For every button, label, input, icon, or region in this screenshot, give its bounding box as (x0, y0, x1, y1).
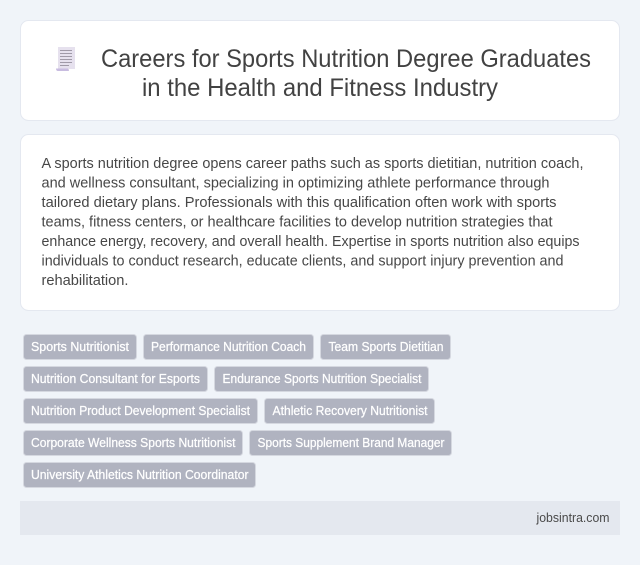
tag: Sports Supplement Brand Manager: Sports Supplement Brand Manager (258, 436, 444, 450)
tag: Sports Supplement Brand Manager (250, 430, 452, 456)
icon: document scroll (56, 47, 75, 71)
text block: description: tailored dietary plans. Professionals with this qualification often work with sports (42, 195, 556, 211)
text block: description: A sports nutrition degree opens career paths such as sports dietitian, nutrition coach, (42, 156, 584, 172)
footer source text: jobsintra.com (536, 511, 610, 525)
tag: Athletic Recovery Nutritionist (264, 398, 434, 424)
tag: Team Sports Dietitian: Team Sports Dietitian (328, 340, 444, 354)
tag: Performance Nutrition Coach: Performance Nutrition Coach (151, 340, 306, 354)
text block: description: individuals to conduct research, educate clients, and support injury prevention and (42, 254, 564, 270)
panel: description card (20, 134, 620, 310)
text block: description (42, 156, 584, 289)
text block: description: enhance energy, recovery, and overall health. Expertise in sports nutrition also equips (42, 234, 580, 250)
tag: Athletic Recovery Nutritionist: Athletic Recovery Nutritionist (272, 404, 428, 418)
tag: Performance Nutrition Coach (144, 334, 314, 360)
tag: University Athletics Nutrition Coordinator (24, 462, 256, 488)
tag list: career roles (24, 334, 452, 488)
tag: Sports Nutritionist: Sports Nutritionist (31, 340, 130, 354)
tag: Endurance Sports Nutrition Specialist (214, 366, 428, 392)
tag: Corporate Wellness Sports Nutritionist (24, 430, 242, 456)
text block: description: rehabilitation. (42, 273, 128, 289)
tag: Sports Nutritionist (24, 334, 136, 360)
tag: Corporate Wellness Sports Nutritionist: Corporate Wellness Sports Nutritionist (31, 436, 236, 450)
tag: University Athletics Nutrition Coordinator: University Athletics Nutrition Coordinator (31, 468, 248, 482)
tag: Nutrition Consultant for Esports: Nutrition Consultant for Esports (31, 372, 200, 386)
text block: description: teams, fitness centers, or healthcare facilities to develop nutrition strategies that (42, 214, 552, 230)
tag: Nutrition Product Development Specialist (24, 398, 258, 424)
title: Careers for Sports Nutrition Degree Graduates (101, 45, 591, 73)
tag: Team Sports Dietitian (320, 334, 450, 360)
tag: Nutrition Product Development Specialist: Nutrition Product Development Specialist (31, 404, 250, 418)
tag: Endurance Sports Nutrition Specialist: Endurance Sports Nutrition Specialist (222, 372, 422, 386)
title: in the Health and Fitness Industry (142, 74, 498, 102)
tag: Nutrition Consultant for Esports (24, 366, 208, 392)
panel: title card (20, 20, 620, 120)
footer bar (20, 501, 620, 535)
text block: description: and wellness consultant, specializing in optimizing athlete performance through (42, 176, 550, 192)
title (101, 45, 591, 102)
